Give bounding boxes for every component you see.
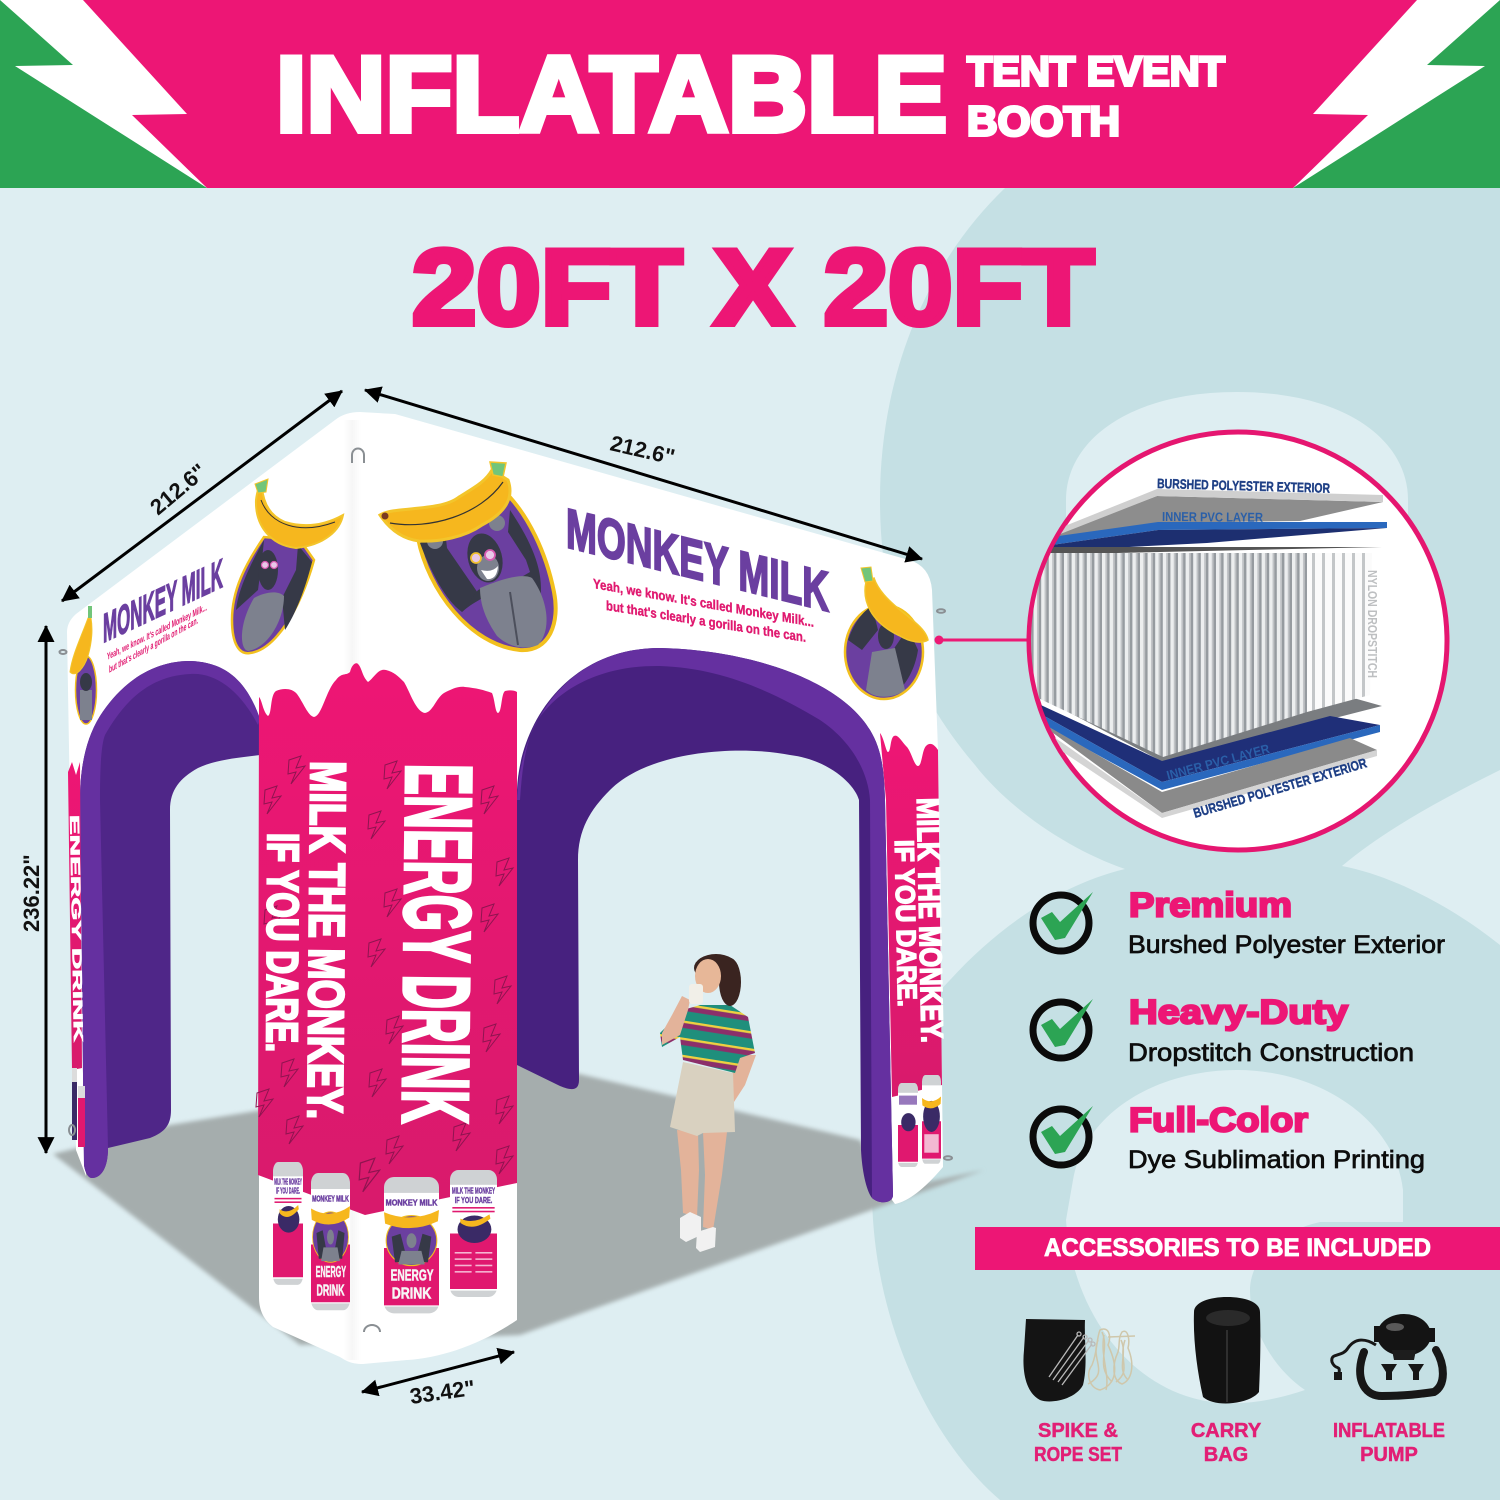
header banner	[0, 0, 1500, 188]
mascot: gorilla with banana left face	[232, 479, 343, 653]
arrow: left roof edge	[62, 391, 342, 601]
floor shadow	[53, 1060, 984, 1345]
can: front label left: DRINK	[316, 1281, 345, 1299]
can: right pillar front label	[922, 1075, 941, 1164]
can: front label center: ENERGY	[391, 1267, 434, 1284]
arrow: height	[44, 626, 48, 1153]
arrow: right roof edge	[365, 390, 922, 559]
mascot: gorilla with banana right face	[380, 462, 556, 650]
top exterior sheet	[1058, 489, 1383, 538]
nylon dropstitch threads	[1025, 553, 1372, 757]
connector line to detail circle	[934, 636, 1030, 644]
label: INFLATABLE	[1333, 1420, 1445, 1442]
feature: premium	[1033, 886, 1445, 959]
person shoes	[680, 1212, 716, 1252]
bottom inner pvc layer	[1030, 700, 1380, 790]
can: front label center: MONKEY MILK	[386, 1198, 438, 1207]
icon: carry bag	[1194, 1297, 1260, 1403]
label: BAG	[1204, 1444, 1248, 1466]
icon: black spike bag	[1023, 1319, 1086, 1401]
right arch	[517, 648, 893, 1202]
size heading: 20FT X 20FT	[412, 227, 1094, 347]
label: left roof dimension: 212.6"	[145, 459, 211, 520]
pillar slogan: if you dare: IF YOU DARE.	[257, 833, 307, 1052]
tagline line one left face: Yeah, we know. It's called Monkey Milk...	[107, 602, 207, 663]
heading: heavy-duty: Heavy-Duty	[1129, 994, 1348, 1032]
accessory: inflatable pump	[1332, 1314, 1445, 1466]
right pillar pink panel	[880, 733, 942, 1097]
label: SPIKE &	[1038, 1420, 1118, 1442]
left strip slogan: energy drink: ENERGY DRINK	[67, 815, 86, 1043]
can: left strip pair	[72, 1068, 85, 1147]
can: front label left	[311, 1173, 350, 1310]
background figure-8 shape	[872, 188, 1500, 1500]
accessories banner: ACCESSORIES TO BE INCLUDED	[1044, 1234, 1431, 1262]
icon: spikes	[1049, 1332, 1095, 1385]
top inner pvc layer	[1030, 522, 1387, 552]
label	[1191, 1420, 1262, 1466]
person drinking milk	[660, 954, 756, 1252]
icon: ropes	[1088, 1329, 1135, 1390]
floor sheet	[1072, 698, 1382, 761]
label: CARRY	[1191, 1420, 1262, 1442]
front pillar pink panel with drips	[258, 663, 517, 1215]
can: back label right	[450, 1170, 497, 1297]
person arm lowered	[723, 1055, 756, 1105]
inflatable tent	[60, 412, 952, 1364]
person raised arm	[662, 996, 690, 1045]
label	[1034, 1420, 1122, 1466]
feature: heavy-duty	[1033, 994, 1414, 1067]
pillar slogan: energy drink: ENERGY DRINK	[383, 763, 491, 1124]
arrow: pillar width	[362, 1352, 514, 1392]
can: front label left: ENERGY	[316, 1263, 346, 1281]
corner fold shading	[343, 420, 361, 1360]
person shorts	[670, 1062, 735, 1136]
icon: pump	[1332, 1314, 1443, 1396]
can: front label center: DRINK	[392, 1285, 432, 1303]
label: bottom exterior: BURSHED POLYESTER EXTERIOR	[1192, 755, 1369, 821]
can: back label right: MILK THE MONKEY	[452, 1186, 496, 1195]
left green corner with lightning bolt	[0, 0, 207, 188]
label	[1333, 1420, 1445, 1466]
person shirt	[660, 1005, 755, 1073]
tent white body	[67, 412, 943, 1364]
label: top pvc: INNER PVC LAYER	[1162, 509, 1264, 525]
right pillar slogan: milk the monkey: MILK THE MONKEY.	[910, 797, 950, 1043]
upper stitch plate	[1050, 547, 1381, 554]
tie-down rings	[60, 448, 952, 1332]
heading: full-color: Full-Color	[1129, 1102, 1308, 1140]
text: polyester exterior: Burshed Polyester Exterior	[1128, 931, 1445, 959]
accessories banner	[975, 1227, 1500, 1270]
text: dropstitch construction: Dropstitch Construction	[1128, 1039, 1414, 1067]
title: inflatable: INFLATABLE	[276, 34, 947, 154]
accessory: carry bag	[1191, 1297, 1262, 1466]
can: front label center	[384, 1177, 439, 1313]
left arch	[80, 661, 260, 1178]
title: booth: BOOTH	[967, 98, 1120, 144]
tagline line two right face: but that's clearly a gorilla on the can.	[606, 598, 806, 645]
can: back label right: IF YOU DARE.	[455, 1195, 492, 1205]
icon: check	[1033, 999, 1093, 1058]
mascot: small far left	[70, 606, 96, 724]
person glass of milk	[689, 984, 703, 1004]
person legs	[677, 1130, 727, 1230]
title: tent event: TENT EVENT	[967, 48, 1225, 94]
right pillar slogan: if you dare: IF YOU DARE.	[889, 840, 922, 1007]
inflatable tent: MONKEY MILK	[103, 551, 223, 652]
mascot: small far right	[845, 567, 928, 699]
can: right pillar back label	[898, 1083, 918, 1167]
bottom exterior sheet	[1050, 728, 1377, 818]
label: top exterior: BURSHED POLYESTER EXTERIOR	[1157, 476, 1330, 496]
can: front label left: MONKEY MILK	[312, 1196, 349, 1204]
can: back label far left	[273, 1162, 303, 1285]
person hair	[694, 954, 741, 1006]
pillar slogan: milk the monkey: MILK THE MONKEY.	[297, 761, 356, 1119]
tagline line two left face: but that's clearly a gorilla on the can.	[109, 615, 198, 676]
left strip pink panel	[68, 762, 82, 1070]
label: right roof dimension: 212.6"	[608, 431, 677, 470]
heading: premium: Premium	[1129, 886, 1292, 924]
can: back label far left: MILK THE MONKEY	[274, 1178, 302, 1187]
dimension arrows	[19, 390, 922, 1409]
label: PUMP	[1360, 1444, 1418, 1466]
monkey milk logo right face: MONKEY MILK	[566, 498, 829, 624]
lightning pattern on pillar	[256, 756, 513, 1192]
label: bottom pvc: INNER PVC LAYER	[1165, 741, 1272, 783]
icon: check	[1033, 892, 1093, 951]
label: pillar width dimension: 33.42"	[408, 1375, 477, 1409]
tagline line one right face: Yeah, we know. It's called Monkey Milk...	[593, 576, 814, 630]
person face	[695, 959, 721, 993]
label: ROPE SET	[1034, 1444, 1122, 1466]
icon: check	[1033, 1106, 1093, 1165]
right green corner with lightning bolt	[1293, 0, 1500, 188]
feature: full-color	[1033, 1102, 1425, 1174]
label: height dimension: 236.22"	[19, 854, 44, 932]
accessory: spike and rope set	[1023, 1319, 1135, 1466]
can: back label far left: IF YOU DARE.	[276, 1188, 300, 1196]
material detail circle	[1025, 432, 1447, 850]
label: nylon dropstitch: NYLON DROPSTITCH	[1365, 570, 1380, 678]
text: dye sublimation: Dye Sublimation Printing	[1128, 1146, 1425, 1174]
